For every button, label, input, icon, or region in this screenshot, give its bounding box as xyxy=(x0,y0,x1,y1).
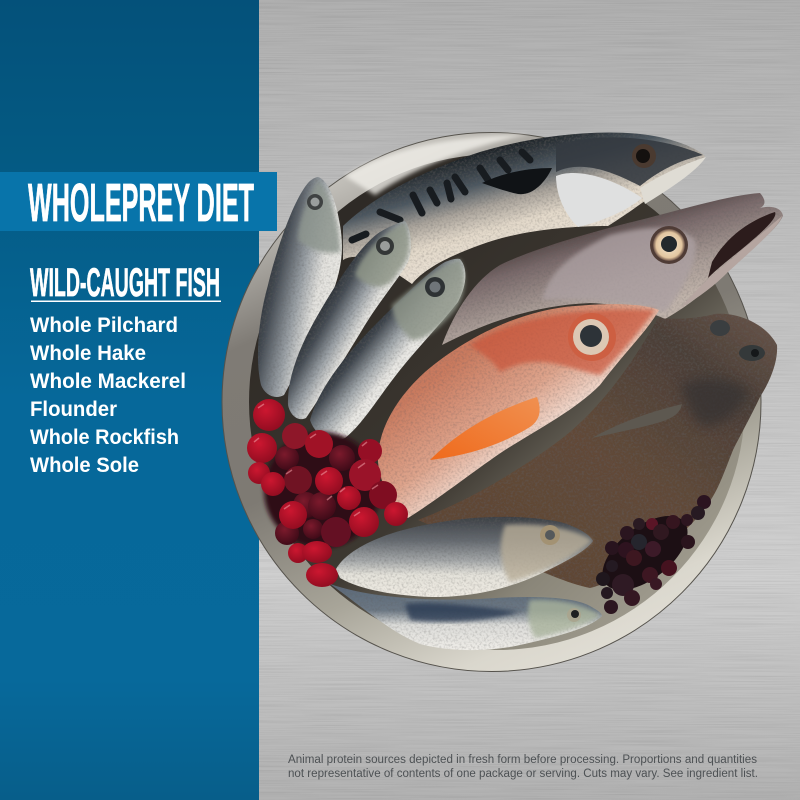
ingredient list: Whole Rockfish xyxy=(30,426,179,449)
mackerel jaw xyxy=(640,157,706,204)
fish: sardine left xyxy=(258,177,342,397)
heading band xyxy=(0,172,277,231)
mackerel eye xyxy=(632,144,656,168)
lower sardine one head xyxy=(501,524,592,582)
fish: sardine middle xyxy=(288,221,411,419)
flounder eyes xyxy=(710,320,765,361)
fish: lower sardine two xyxy=(330,584,602,650)
flounder dark head shade xyxy=(680,379,750,426)
berry highlights xyxy=(254,404,378,516)
brushed steel background xyxy=(259,0,800,800)
infographic scene: WHOLEPREY DIET xyxy=(28,173,254,233)
flounder pectoral fin xyxy=(592,404,682,438)
ingredient list: Flounder xyxy=(30,398,117,421)
rockfish tail fin xyxy=(430,397,540,460)
ingredient list: Whole Sole xyxy=(30,454,139,477)
ingredient list: Whole Hake xyxy=(30,342,146,365)
lower sardine two eye xyxy=(567,608,581,622)
lower sardine two dark stripe xyxy=(405,603,520,622)
disclaimer: Animal protein sources depicted in fresh form before processing. Proportions and quantities xyxy=(288,754,757,766)
blue side panel xyxy=(0,0,259,800)
lower sardine one eye xyxy=(540,525,560,545)
hake gill and cheek xyxy=(542,228,696,312)
infographic scene: WILD-CAUGHT FISH xyxy=(30,261,220,305)
lower sardine two head xyxy=(528,600,600,638)
fish: top mackerel xyxy=(343,133,706,284)
fish: rockfish xyxy=(378,304,659,518)
hake open mouth xyxy=(708,212,775,278)
ingredient list: Whole Mackerel xyxy=(30,370,186,393)
sardine left eye xyxy=(307,194,323,210)
fish: sardine right xyxy=(310,259,465,440)
sardine left head xyxy=(298,180,340,253)
fish: lower sardine one xyxy=(336,517,593,597)
sardine right head xyxy=(392,259,465,340)
bowl xyxy=(222,132,761,672)
mackerel dark stripes xyxy=(352,152,530,240)
hake eye xyxy=(650,226,688,264)
fish: flounder xyxy=(418,314,777,588)
disclaimer xyxy=(288,754,758,780)
dark berries xyxy=(590,495,711,614)
ingredient list xyxy=(30,314,186,477)
rockfish eye xyxy=(568,313,616,361)
sardine middle head xyxy=(355,222,410,287)
disclaimer: not representative of contents of one package or serving. Cuts may vary. See ingredient list. xyxy=(288,768,758,780)
mackerel dorsal blotch xyxy=(482,168,552,194)
cranberries xyxy=(247,399,408,587)
hake lower jaw xyxy=(680,216,782,308)
fish: hake xyxy=(442,193,783,345)
mackerel head top xyxy=(556,137,703,186)
sardine right eye xyxy=(425,277,445,297)
mackerel gill cover xyxy=(556,173,642,227)
rockfish red back xyxy=(470,309,655,375)
sardine middle eye xyxy=(376,237,394,255)
ingredient list: Whole Pilchard xyxy=(30,314,178,337)
